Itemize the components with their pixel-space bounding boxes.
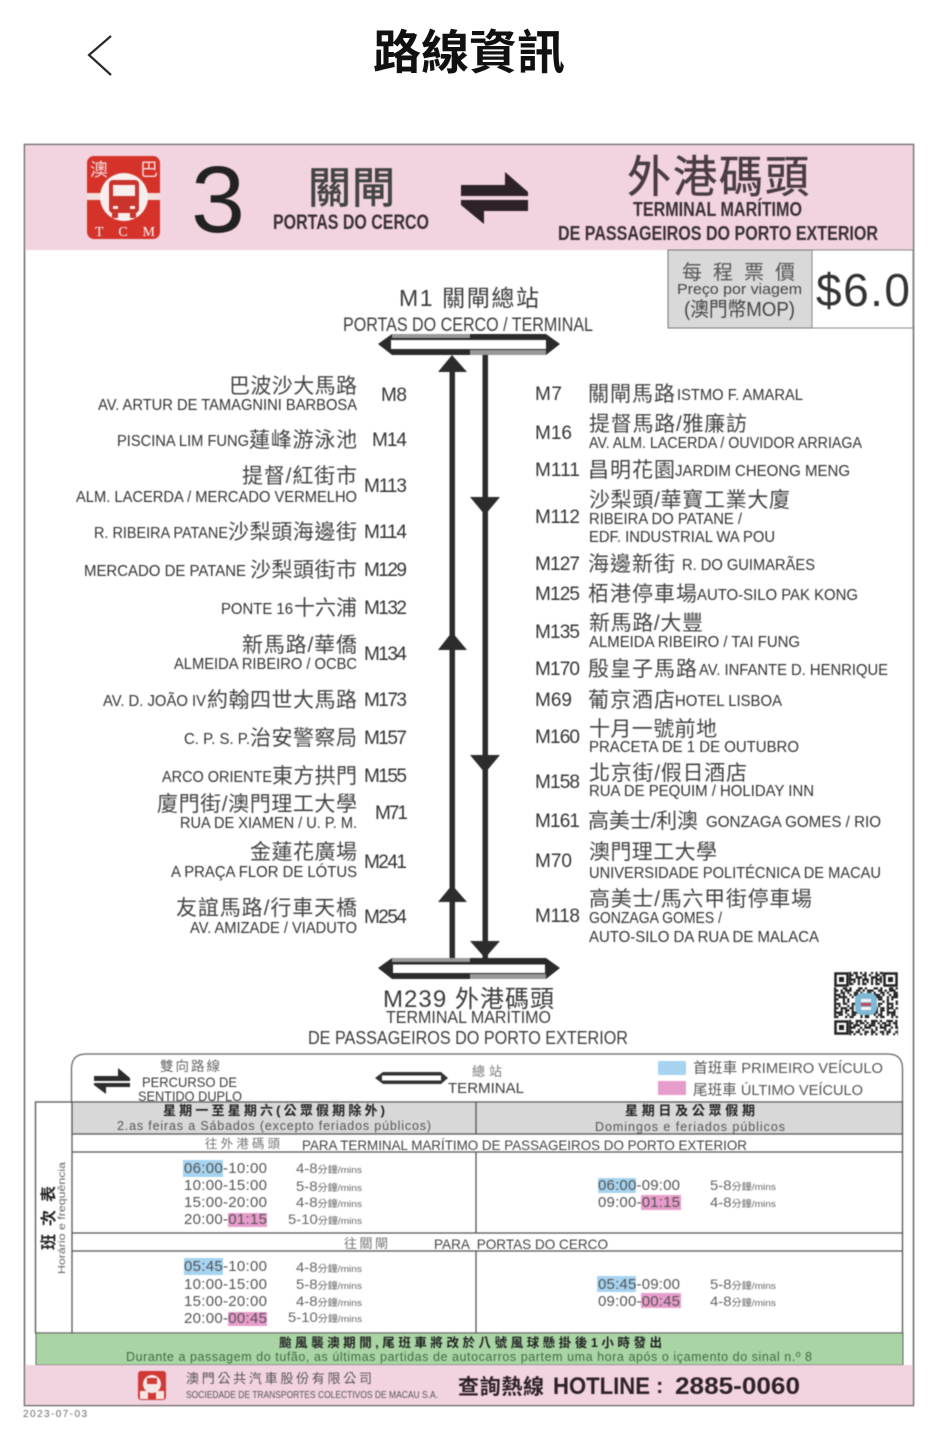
holiday times to Terminal Marítimo: 06:00-09:00	[598, 1177, 680, 1194]
holiday times to Terminal Marítimo	[598, 1177, 776, 1211]
stop M135: ALMEIDA RIBEIRO / TAI FUNG	[589, 634, 800, 651]
destination name: TERMINAL MARÍTIMO	[633, 198, 802, 221]
holiday times to Portas do Cerco: 09:00-00:45	[598, 1293, 680, 1310]
destination terminal label	[308, 986, 628, 1048]
stop M8: 巴波沙大馬路	[229, 375, 357, 398]
stop M16	[535, 413, 863, 452]
stop M161: M161	[535, 811, 580, 832]
holiday times to Terminal Marítimo: 5-8分鐘/mins	[710, 1177, 776, 1193]
timetable side label	[39, 1162, 68, 1274]
stop M129	[84, 559, 407, 582]
stop M14: 蓮峰游泳池	[249, 429, 357, 452]
title: 路線資訊	[373, 26, 565, 79]
stop M112	[535, 489, 790, 546]
stop M70: M70	[535, 851, 572, 872]
stop M158: RUA DE PEQUIM / HOLIDAY INN	[589, 783, 814, 800]
stop M112: 沙梨頭/華寶工業大廈	[589, 489, 790, 512]
destination terminal label: M239 外港碼頭	[383, 986, 554, 1013]
stop M161	[535, 810, 881, 833]
stop M132: M132	[364, 598, 407, 619]
panel: fare box: (澳門幣MOP)	[684, 298, 795, 321]
company name: SOCIEDADE DE TRANSPORTES COLECTIVOS DE MACAU S.A.	[186, 1390, 438, 1401]
weekday times to Portas do Cerco	[184, 1258, 362, 1327]
stop M71: M71	[375, 803, 408, 824]
stop M69	[535, 689, 783, 712]
stop M161: GONZAGA GOMES / RIO	[706, 814, 881, 831]
stop M157	[184, 727, 407, 750]
hotline: HOTLINE	[553, 1373, 650, 1400]
holiday times to Terminal Marítimo: 4-8分鐘/mins	[710, 1194, 776, 1210]
icon: TCM logo: 巴	[140, 160, 158, 180]
stop M125	[535, 583, 858, 606]
panel: fare box	[668, 250, 913, 328]
stop M125: AUTO-SILO PAK KONG	[697, 587, 858, 604]
destination terminal label: TERMINAL MARÍTIMO	[386, 1007, 551, 1027]
stop M160: 十月一號前地	[589, 718, 717, 741]
stop M160	[535, 718, 799, 756]
stop M8	[98, 375, 407, 414]
stop M69: HOTEL LISBOA	[675, 693, 783, 710]
stop M158	[535, 762, 814, 800]
down line with arrowheads	[470, 350, 500, 958]
stop M157: C. P. S. P.	[184, 731, 250, 748]
direction header: to Portas do Cerco	[344, 1236, 608, 1252]
stop M160: PRACETA DE 1 DE OUTUBRO	[589, 739, 799, 756]
stop M241	[171, 841, 407, 881]
stop M118: GONZAGA GOMES /	[589, 910, 723, 927]
stop M127: M127	[535, 554, 580, 575]
weekday times to Terminal Marítimo: 5-8分鐘/mins	[296, 1178, 362, 1194]
icon: bottom terminal bar	[378, 958, 560, 979]
stop M113: ALM. LACERDA / MERCADO VERMELHO	[76, 489, 357, 506]
origin terminal label: M1 關閘總站	[399, 285, 539, 311]
stop M160: M160	[535, 727, 580, 748]
origin name: 關閘	[308, 165, 395, 213]
stop M7: M7	[535, 384, 562, 405]
stop M135: M135	[535, 622, 580, 643]
stop M69: 葡京酒店	[588, 689, 675, 712]
stop M113	[76, 465, 407, 506]
column header: weekdays	[117, 1103, 431, 1133]
stop M158: 北京街/假日酒店	[589, 762, 747, 785]
weekday times to Terminal Marítimo: 15:00-20:00	[184, 1194, 267, 1211]
stop M71	[157, 793, 408, 832]
weekday times to Terminal Marítimo: 06:00-10:00	[184, 1160, 267, 1177]
stop M170	[535, 658, 888, 681]
print date: 2023-07-03	[23, 1409, 87, 1420]
weekday times to Terminal Marítimo: 20:00-01:15	[184, 1211, 267, 1228]
destination name: 外港碼頭	[627, 153, 809, 202]
stop M70	[535, 841, 881, 882]
stop M127	[535, 553, 815, 576]
stop M70: 澳門理工大學	[589, 841, 717, 864]
stop M170: AV. INFANTE D. HENRIQUE	[699, 662, 888, 679]
stop M155: M155	[364, 766, 407, 787]
timetable side label: Horário e frequência	[56, 1162, 68, 1274]
stop M118: AUTO-SILO DA RUA DE MALACA	[589, 929, 820, 946]
stop M129: MERCADO DE PATANE	[84, 563, 246, 580]
column header: weekdays: 2.as feiras a Sábados (excepto feriados públicos)	[117, 1119, 431, 1133]
holiday times to Portas do Cerco: 5-8分鐘/mins	[710, 1276, 776, 1292]
stop M129: 沙梨頭街市	[250, 559, 357, 582]
column header: Sundays and holidays: 星期日及公眾假期	[625, 1103, 755, 1118]
column header: Sundays and holidays: Domingos e feriados públicos	[595, 1120, 785, 1134]
company name: 澳門公共汽車股份有限公司	[186, 1371, 372, 1386]
typhoon notice	[36, 1333, 903, 1365]
stop M129: M129	[364, 560, 407, 581]
holiday times to Portas do Cerco	[597, 1276, 776, 1310]
direction header: to Terminal Marítimo: 往外港碼頭	[205, 1136, 280, 1151]
stop M118: 高美士/馬六甲街停車場	[589, 888, 812, 911]
stop M16: 提督馬路/雅廉訪	[589, 413, 747, 436]
holiday times to Portas do Cerco: 4-8分鐘/mins	[710, 1293, 776, 1309]
weekday times to Portas do Cerco: 15:00-20:00	[184, 1293, 267, 1310]
stop M14: M14	[372, 430, 407, 451]
stop M118: M118	[535, 906, 580, 927]
stop M134	[174, 634, 407, 673]
stop M132	[221, 597, 407, 620]
panel: timetable	[35, 1102, 903, 1333]
origin terminal label: PORTAS DO CERCO / TERMINAL	[343, 315, 593, 336]
stop M161: 高美士/利澳	[588, 810, 698, 833]
stop M155: ARCO ORIENTE	[162, 769, 272, 786]
stop M158: M158	[535, 772, 580, 793]
stop M71: 廈門街/澳門理工大學	[157, 793, 357, 816]
weekday times to Portas do Cerco: 4-8分鐘/mins	[296, 1293, 362, 1309]
legend: first bus: 首班車 PRIMEIRO VEÍCULO	[693, 1060, 883, 1077]
stop M127: 海邊新街	[588, 553, 675, 576]
direction header: to Portas do Cerco: PARA PORTAS DO CERCO	[434, 1236, 608, 1252]
stop M173: AV. D. JOÃO IV	[103, 693, 207, 710]
panel: route header	[25, 145, 913, 253]
stop M157: M157	[364, 728, 407, 749]
icon: TCM logo: 澳	[90, 160, 108, 180]
legend: two-way route: SENTIDO DUPLO	[138, 1088, 242, 1104]
weekday times to Portas do Cerco: 4-8分鐘/mins	[296, 1259, 362, 1275]
stop M7	[535, 383, 803, 406]
hotline	[458, 1373, 800, 1400]
icon: TCM logo	[87, 156, 160, 240]
panel: fare box: Preço por viagem	[677, 281, 802, 298]
column header: Sundays and holidays	[595, 1103, 785, 1134]
stop M111: JARDIM CHEONG MENG	[675, 463, 850, 480]
stop M134: ALMEIDA RIBEIRO / OCBC	[174, 656, 357, 673]
stop M14: PISCINA LIM FUNG	[117, 433, 249, 450]
stop M132: 十六浦	[294, 597, 357, 620]
stop M155: 東方拱門	[272, 765, 357, 788]
stop M112: RIBEIRA DO PATANE /	[589, 511, 743, 528]
legend: last bus: 尾班車 ÚLTIMO VEÍCULO	[693, 1082, 863, 1099]
holiday times to Terminal Marítimo: 09:00-01:15	[598, 1194, 680, 1211]
stop M111	[535, 459, 850, 482]
icon: top terminal bar	[378, 334, 560, 355]
stop M173: 約翰四世大馬路	[207, 689, 357, 712]
weekday times to Terminal Marítimo: 4-8分鐘/mins	[296, 1194, 362, 1210]
stop M113: 提督/紅街市	[242, 465, 357, 488]
route line diagram	[378, 334, 560, 979]
stop M157: 治安警察局	[250, 727, 357, 750]
typhoon notice: Durante a passagem do tufão, as últimas partidas de autocarros partem uma hora após o içamento do sinal n.º 8	[126, 1350, 812, 1364]
stop M254: M254	[364, 907, 407, 928]
hotline: :	[656, 1373, 663, 1398]
stop M254	[176, 897, 407, 937]
legend: terminal	[375, 1064, 524, 1097]
stop M254: 友誼馬路/行車天橋	[176, 897, 357, 920]
stop M241: 金蓮花廣場	[250, 841, 357, 864]
weekday times to Terminal Marítimo: 4-8分鐘/mins	[296, 1160, 362, 1176]
stop M241: A PRAÇA FLOR DE LÓTUS	[171, 864, 357, 881]
destination terminal label: DE PASSAGEIROS DO PORTO EXTERIOR	[308, 1028, 628, 1048]
legend: two-way route: 雙向路線	[160, 1059, 220, 1074]
stop M127: R. DO GUIMARÃES	[682, 557, 815, 574]
legend: two-way route: PERCURSO DE	[142, 1074, 237, 1090]
direction header: to Portas do Cerco: 往關閘	[344, 1236, 388, 1251]
footer band	[25, 1365, 913, 1405]
weekday times to Terminal Marítimo	[183, 1160, 362, 1228]
hotline: 查詢熱線	[458, 1376, 544, 1399]
weekday times to Portas do Cerco: 10:00-15:00	[184, 1276, 267, 1293]
stop M134: 新馬路/華僑	[242, 634, 357, 657]
legend: two-way route	[94, 1059, 242, 1104]
stop M254: AV. AMIZADE / VIADUTO	[190, 920, 357, 937]
icon: back chevron	[89, 36, 111, 75]
panel: fare box: $6.0	[816, 264, 910, 316]
column header: weekdays: 星期一至星期六(公眾假期除外)	[163, 1103, 385, 1118]
holiday times to Portas do Cerco: 05:45-09:00	[598, 1276, 680, 1293]
weekday times to Terminal Marítimo: 10:00-15:00	[184, 1177, 267, 1194]
panel: fare box: 每程票價	[682, 261, 795, 284]
legend: terminal: 總站	[472, 1064, 502, 1079]
company name	[186, 1371, 438, 1401]
stop M111: 昌明花園	[588, 459, 675, 482]
direction header: to Terminal Marítimo: PARA TERMINAL MARÍTIMO DE PASSAGEIROS DO PORTO EXTERIOR	[302, 1137, 747, 1153]
icon: TCM logo: TCM	[95, 225, 156, 240]
stop M114: 沙梨頭海邊街	[228, 521, 357, 544]
stop M155	[162, 765, 407, 788]
stops: right column (towards Terminal Marítimo)	[535, 383, 888, 946]
weekday times to Portas do Cerco: 5-10分鐘/mins	[288, 1309, 362, 1325]
icon: two-way arrows	[461, 172, 528, 224]
stop M134: M134	[364, 644, 407, 665]
stop M14	[117, 429, 407, 452]
stop M7: 關閘馬路	[588, 383, 675, 406]
weekday times to Portas do Cerco: 5-8分鐘/mins	[296, 1276, 362, 1292]
stop M132: PONTE 16	[221, 601, 293, 618]
stop M16: AV. ALM. LACERDA / OUVIDOR ARRIAGA	[589, 435, 863, 452]
stop M113: M113	[364, 476, 407, 497]
timetable side label: 班次表	[39, 1186, 58, 1250]
typhoon notice: 颱風襲澳期間,尾班車將改於八號風球懸掛後1小時發出	[279, 1335, 662, 1350]
stop M7: ISTMO F. AMARAL	[677, 387, 803, 404]
icon: TCM company logo	[138, 1371, 166, 1400]
page title bar	[89, 26, 565, 79]
origin terminal label	[343, 285, 593, 336]
stop M71: RUA DE XIAMEN / U. P. M.	[180, 815, 357, 832]
route number: 3	[191, 147, 245, 253]
origin name	[273, 165, 429, 234]
stop M173: M173	[364, 690, 407, 711]
stop M125: 栢港停車場	[588, 583, 697, 606]
stop M16: M16	[535, 423, 572, 444]
icon: QR code	[834, 972, 898, 1036]
stop M114: R. RIBEIRA PATANE	[94, 525, 228, 542]
stop M8: M8	[381, 385, 407, 406]
destination name	[558, 153, 878, 245]
stop M69: M69	[535, 690, 572, 711]
legend: terminal: TERMINAL	[448, 1080, 524, 1097]
stop M125: M125	[535, 584, 580, 605]
weekday times to Portas do Cerco: 05:45-10:00	[184, 1258, 267, 1275]
stop M241: M241	[364, 852, 407, 873]
stop M170: M170	[535, 659, 580, 680]
panel: legend	[72, 1054, 902, 1104]
origin name: PORTAS DO CERCO	[273, 211, 429, 234]
stop M114: M114	[364, 522, 407, 543]
stop M112: EDF. INDUSTRIAL WA POU	[589, 529, 775, 546]
stop M118	[535, 888, 820, 946]
stop M135: 新馬路/大豐	[589, 612, 703, 635]
stop M8: AV. ARTUR DE TAMAGNINI BARBOSA	[98, 397, 358, 414]
stop M135	[535, 612, 800, 651]
stop M173	[103, 689, 407, 712]
stop M112: M112	[535, 507, 580, 528]
stop M70: UNIVERSIDADE POLITÉCNICA DE MACAU	[589, 865, 881, 882]
hotline: 2885-0060	[675, 1373, 800, 1400]
stop M170: 殷皇子馬路	[588, 658, 697, 681]
weekday times to Portas do Cerco: 20:00-00:45	[184, 1310, 267, 1327]
up line with arrowheads	[438, 355, 467, 960]
weekday times to Terminal Marítimo: 5-10分鐘/mins	[288, 1211, 362, 1227]
stop M111: M111	[535, 460, 580, 481]
stop M114	[94, 521, 407, 544]
stops: left column (towards Portas do Cerco)	[76, 375, 408, 937]
